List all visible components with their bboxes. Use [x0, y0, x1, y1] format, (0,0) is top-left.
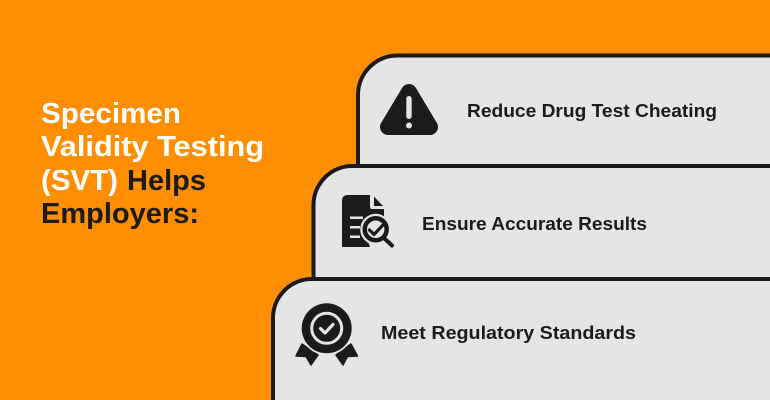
heading: meet regulatory standards: Meet Regulatory Standards	[381, 323, 636, 343]
panel: ensure accurate results	[314, 166, 770, 295]
title: Validity Testing	[41, 131, 264, 163]
heading: ensure accurate results: Ensure Accurate Results	[422, 214, 647, 234]
panel: reduce drug test cheating	[358, 56, 770, 180]
heading: reduce drug test cheating: Reduce Drug Test Cheating	[467, 101, 717, 121]
title: Employers:	[41, 198, 199, 230]
title: (SVT)	[41, 165, 118, 197]
icon: document with magnifier	[342, 195, 392, 247]
title: Specimen	[41, 98, 181, 130]
panel 2 card	[314, 166, 770, 295]
icon: award medal	[296, 302, 358, 365]
panel 1 card	[358, 56, 770, 180]
title: Helps	[127, 165, 206, 197]
title	[41, 98, 264, 230]
panel 3 card	[273, 279, 770, 400]
icon: warning triangle	[388, 92, 430, 128]
panel: meet regulatory standards	[273, 279, 770, 400]
